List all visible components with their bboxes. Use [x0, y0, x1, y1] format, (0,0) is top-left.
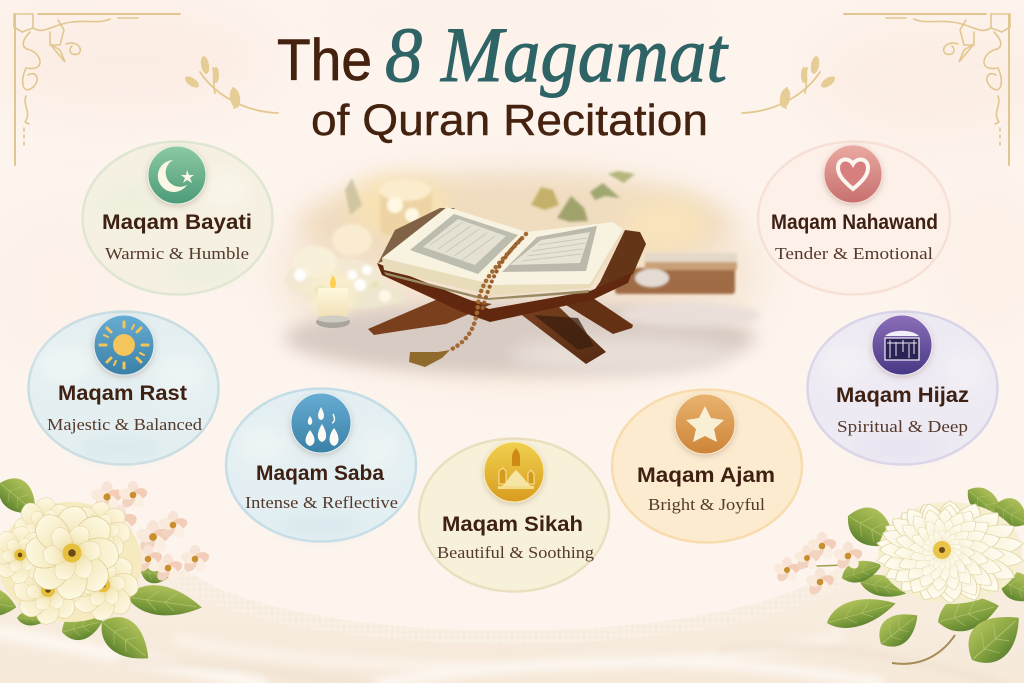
table and books on the right: [615, 253, 737, 294]
icon: heart: [824, 145, 882, 203]
cloth drape at the bottom: [0, 560, 1024, 683]
prayer beads and tassel: [409, 234, 526, 367]
blossoms: [90, 481, 211, 583]
flower cluster: bottom right: [773, 480, 1024, 674]
title word: The: The: [277, 28, 372, 93]
card wash: [37, 345, 206, 458]
corner ornament: top right: [844, 14, 1010, 165]
blossom sprig: [773, 532, 864, 597]
card: Maqam Nahawand: [758, 142, 950, 294]
description: Warmic & Humble: [105, 244, 249, 263]
lace band: [175, 566, 850, 644]
icon: mosque: [484, 442, 544, 502]
description: Beautiful & Soothing: [437, 543, 595, 562]
name: Maqam Rast: [58, 382, 187, 405]
card wash: [821, 345, 987, 458]
name: Maqam Hijaz: [836, 384, 969, 407]
name: Maqam Ajam: [637, 464, 775, 487]
description: Bright & Joyful: [648, 495, 765, 514]
corner ornament: top left: [14, 14, 180, 165]
paper texture: [0, 0, 1024, 370]
candle: [309, 273, 357, 328]
wooden rehal stand: [368, 208, 646, 364]
card: Maqam Saba: [226, 388, 416, 542]
cream blooms: [0, 498, 142, 624]
description: Tender & Emotional: [775, 244, 933, 263]
central photo: Quran on rehal: [280, 171, 760, 375]
leaves: [823, 480, 1024, 674]
lantern: [379, 179, 432, 235]
card: Maqam Hijaz: [808, 312, 998, 464]
icon: water drops: [291, 393, 351, 453]
card: Maqam Sikah: [419, 438, 609, 592]
icon: star: [675, 394, 735, 454]
card: Maqam Ajam: [612, 390, 802, 542]
icon: Kaaba: [872, 315, 932, 375]
card wash: [96, 170, 249, 284]
card wash: [236, 425, 400, 535]
name: Maqam Sikah: [442, 513, 583, 536]
leaves: [0, 470, 204, 671]
icon: crescent and star: [148, 146, 206, 204]
title script: 8 Magamat: 8 Magamat: [385, 11, 729, 98]
white dahlia: [871, 494, 1024, 610]
title: [277, 11, 729, 145]
left page text lines: [430, 222, 495, 260]
name: Maqam Nahawand: [771, 211, 938, 234]
cloth folds: [0, 632, 1000, 683]
icon: sun: [94, 315, 154, 375]
title line two: of Quran Recitation: [311, 96, 708, 145]
name: Maqam Bayati: [102, 211, 252, 234]
description: Spiritual & Deep: [837, 417, 968, 436]
right page: [488, 222, 623, 285]
description: Majestic & Balanced: [47, 415, 203, 434]
right page text lines: [522, 238, 587, 261]
stem: [892, 635, 955, 664]
soft photo backdrop: [280, 175, 760, 375]
card: Maqam Bayati: [82, 142, 272, 294]
sprig right of title: [742, 55, 837, 113]
white blossoms left of the stand: [285, 224, 405, 308]
sprig left of title: [183, 55, 278, 113]
description: Intense & Reflective: [245, 493, 398, 512]
page block: [382, 229, 625, 296]
flower cluster: bottom left: [0, 470, 211, 671]
card: Maqam Rast: [28, 312, 218, 464]
open book: [382, 207, 625, 300]
background greenery: [345, 171, 635, 222]
left page: [382, 207, 527, 282]
name: Maqam Saba: [256, 462, 384, 485]
